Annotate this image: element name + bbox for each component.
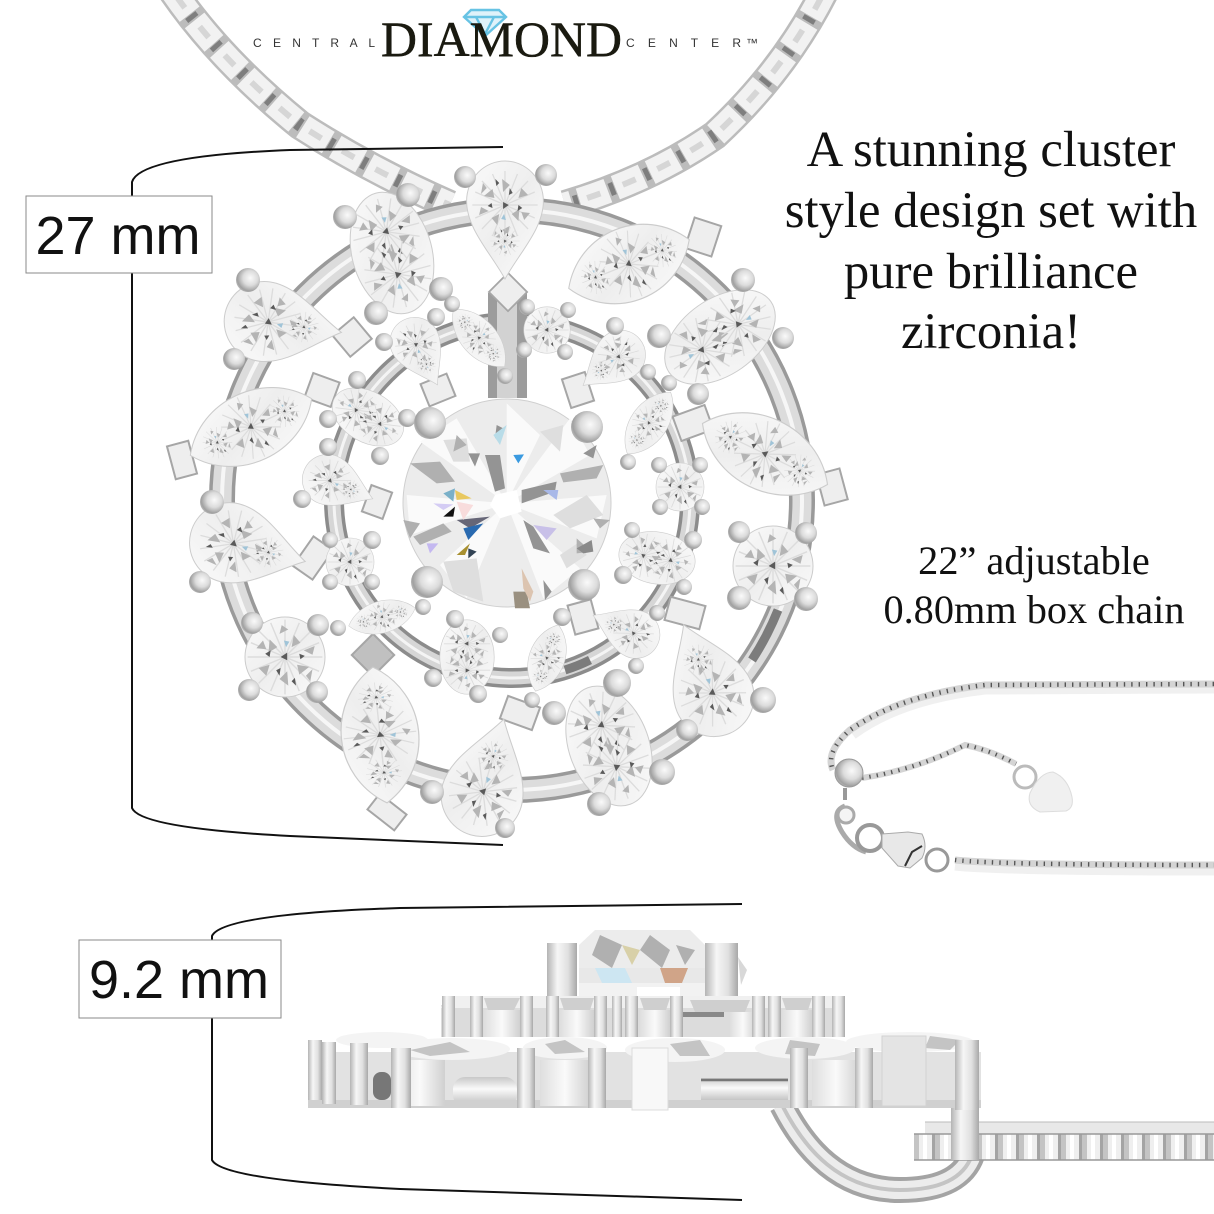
inner ring (334, 322, 690, 678)
centre stone (403, 399, 611, 608)
chain spec text (883, 538, 1185, 632)
bail loop (782, 1105, 972, 1190)
clasp (837, 788, 948, 871)
side chain (914, 1122, 1214, 1160)
slider bead (835, 759, 863, 787)
logo: central: C E N T R A L (253, 36, 375, 50)
prongs (189, 164, 818, 838)
heading text: style design set with (785, 182, 1197, 238)
heading text (785, 121, 1197, 359)
label: 9.2 mm: 9.2 mm (89, 950, 269, 1010)
vertical stem (488, 293, 527, 398)
dimension bracket: 27 mm (132, 147, 503, 845)
second tier (441, 996, 845, 1037)
upper chain (831, 684, 1214, 770)
outer stones (176, 161, 843, 846)
logo: wordmark: DIAMOND (381, 11, 622, 67)
third tier (308, 1032, 981, 1110)
pendant front view (167, 161, 848, 846)
chain spec text: 0.80mm box chain (883, 587, 1185, 632)
tag ring (1014, 766, 1036, 788)
centre stone side (547, 930, 747, 1000)
lower chain (955, 860, 1214, 871)
pendant side view (308, 930, 1214, 1190)
inner stones (295, 298, 704, 697)
logo (253, 10, 758, 67)
outer ring (222, 210, 802, 790)
square settings (167, 217, 848, 830)
logo: diamond icon (464, 10, 506, 36)
heading text: zirconia! (901, 303, 1081, 359)
logo: center: C E N T E R™ (626, 36, 758, 50)
slider chain to tag (862, 745, 1016, 778)
ring shadow segments (260, 330, 778, 670)
label: 9.2 mm (79, 940, 281, 1018)
bail post (951, 1105, 979, 1160)
chain spec text: 22” adjustable (918, 538, 1150, 583)
box chain: right strand (565, 0, 825, 205)
label: 27 mm: 27 mm (35, 206, 201, 266)
heading text: A stunning cluster (807, 121, 1176, 177)
dimension bracket: 9.2 mm (212, 904, 742, 1200)
label: 27 mm (26, 196, 212, 273)
heading text: pure brilliance (844, 243, 1138, 299)
box chain: left strand (172, 0, 450, 205)
heart tag (1029, 772, 1072, 812)
adjustable chain photo (831, 684, 1214, 871)
